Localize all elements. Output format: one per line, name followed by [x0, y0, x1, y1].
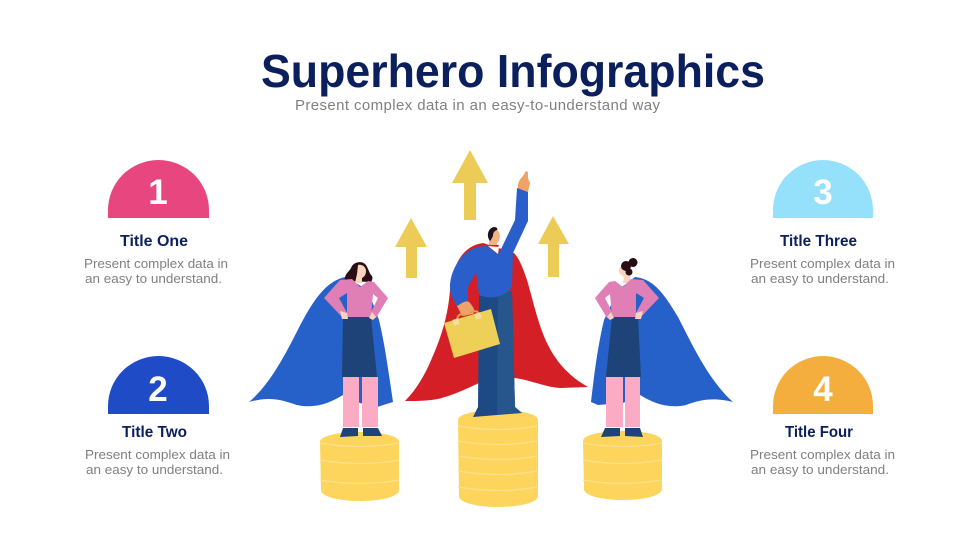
description 1	[84, 256, 228, 286]
badge 1	[108, 160, 209, 218]
collar	[487, 245, 499, 250]
panel: item 4	[750, 356, 895, 477]
description 3	[750, 256, 895, 286]
description 1: Present complex data in	[84, 256, 228, 271]
legs	[343, 377, 378, 427]
sweater	[595, 279, 659, 318]
skirt	[342, 317, 377, 377]
shirt v-neck	[488, 246, 499, 254]
figure: right heroine	[591, 258, 733, 437]
description 4: an easy to understand.	[751, 462, 889, 477]
coin stack: right	[583, 431, 662, 500]
hair	[345, 262, 372, 282]
badge 2	[108, 356, 209, 414]
description 3: an easy to understand.	[751, 271, 889, 286]
description 2	[85, 447, 230, 477]
face	[355, 265, 366, 283]
subtitle: Present complex data in an easy-to-understand way	[295, 97, 660, 114]
blue sweater	[450, 188, 528, 306]
arrow: center up	[452, 150, 488, 220]
heading: title three: Title Three	[780, 233, 857, 250]
description 4: Present complex data in	[750, 447, 895, 462]
trouser highlight	[497, 291, 522, 414]
legs	[606, 377, 640, 427]
coin stack: left	[320, 432, 399, 501]
panel: item 2	[85, 356, 230, 477]
skirt	[606, 317, 641, 377]
hair	[488, 227, 497, 241]
shoes	[340, 428, 382, 437]
panel: item 3	[750, 160, 895, 286]
arrow: left up	[395, 218, 427, 278]
coin stack: center	[458, 410, 538, 507]
hands	[340, 311, 376, 320]
head	[489, 229, 500, 248]
hair with bun	[621, 258, 638, 276]
title: Superhero Infographics	[261, 45, 765, 97]
badge 3: 3	[813, 173, 833, 212]
badge 4: 4	[813, 370, 833, 409]
trousers	[473, 291, 522, 417]
cape	[591, 277, 733, 406]
description 3: Present complex data in	[750, 256, 895, 271]
figure: left heroine	[249, 262, 393, 437]
description 2: Present complex data in	[85, 447, 230, 462]
description 1: an easy to understand.	[85, 271, 222, 286]
briefcase	[444, 309, 500, 358]
heading: title four: Title Four	[785, 424, 853, 441]
arrow: right up	[538, 216, 569, 277]
lower hand	[457, 301, 474, 316]
heading: title two: Title Two	[122, 424, 187, 441]
raised hand	[518, 171, 530, 192]
description 2: an easy to understand.	[86, 462, 223, 477]
cape	[249, 277, 393, 407]
hands	[607, 311, 643, 320]
panel: item 1	[84, 160, 228, 286]
heading: title one: Title One	[120, 233, 188, 250]
figure: center hero	[405, 171, 588, 417]
shoes	[601, 428, 643, 437]
description 4	[750, 447, 895, 477]
badge 2: 2	[148, 370, 168, 409]
badge 3	[773, 160, 873, 218]
badge 1: 1	[148, 173, 168, 212]
red cape	[405, 243, 588, 401]
face	[619, 265, 631, 283]
badge 4	[773, 356, 873, 414]
sweater	[324, 279, 388, 318]
